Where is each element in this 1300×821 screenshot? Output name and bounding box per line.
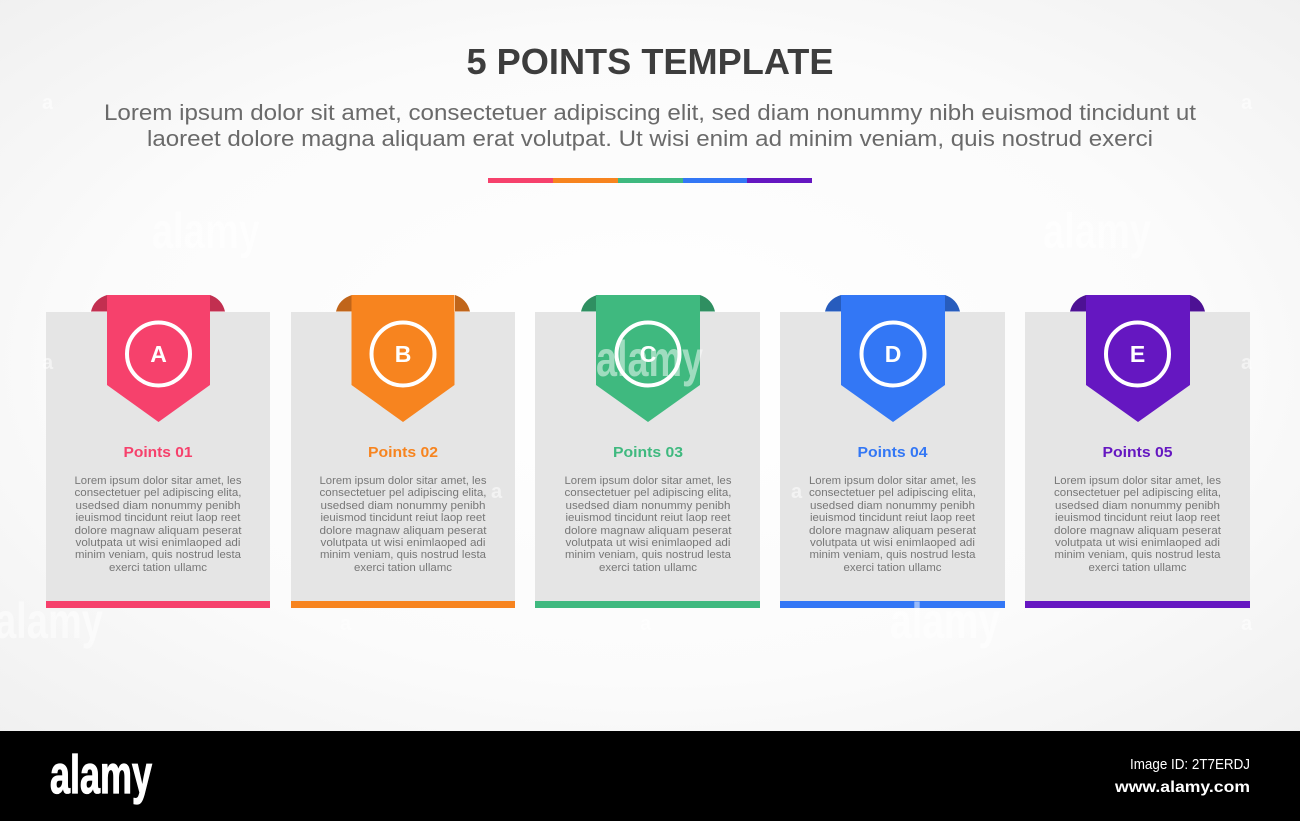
icon: ribbon C: [581, 295, 715, 422]
panel: point 03: [535, 295, 760, 608]
text block: point 05: Lorem ipsum dolor sitar amet, les: [1054, 475, 1222, 487]
footer url: www.alamy.com: [1114, 779, 1250, 796]
watermarks: a: [42, 92, 54, 114]
text block: point 05: ieuismod tincidunt reiut laop reet: [1055, 512, 1220, 524]
text block: point 02: minim veniam, quis nostrud lesta: [320, 549, 487, 561]
heading: points 05: Points 05: [1102, 444, 1172, 461]
text block: point 04: exerci tation ullamc: [844, 562, 942, 574]
text block: point 05: minim veniam, quis nostrud lesta: [1054, 549, 1221, 561]
watermarks: alamy: [152, 203, 260, 259]
text block: point 04: consectetuer pel adipiscing elita,: [809, 487, 976, 499]
panel: point 01: [46, 295, 270, 608]
text block: point 03: usedsed diam nonummy penibh: [566, 500, 730, 512]
text block: point 02: dolore magnaw aliquam peserat: [320, 525, 486, 537]
heading: points 03: Points 03: [613, 444, 683, 461]
text block: point 01: exerci tation ullamc: [109, 562, 208, 574]
text block: point 02: usedsed diam nonummy penibh: [320, 500, 486, 512]
text block: point 03: exerci tation ullamc: [599, 562, 698, 574]
icon: ribbon C: C: [640, 341, 656, 367]
text block: point 01: consectetuer pel adipiscing elita,: [74, 487, 242, 499]
watermarks: a: [340, 613, 352, 635]
text block: point 03: minim veniam, quis nostrud lesta: [565, 549, 732, 561]
text block: point 05: usedsed diam nonummy penibh: [1055, 500, 1220, 512]
text block: point 04: [809, 475, 977, 574]
watermarks: a: [1241, 92, 1253, 114]
text block: point 03: volutpata ut wisi enimlaoped adi: [566, 537, 730, 549]
watermarks: a: [640, 613, 652, 635]
panel: point 04: [780, 295, 1005, 608]
heading: points 01: Points 01: [124, 444, 192, 461]
text block: point 05: consectetuer pel adipiscing elita,: [1054, 487, 1221, 499]
text block: point 04: ieuismod tincidunt reiut laop reet: [810, 512, 975, 524]
text block: point 01: Lorem ipsum dolor sitar amet, les: [74, 475, 242, 487]
icon: ribbon B: B: [395, 341, 411, 367]
text block: point 02: consectetuer pel adipiscing elita,: [320, 487, 486, 499]
watermarks: alamy: [596, 331, 703, 387]
text block: point 01: [74, 475, 242, 574]
text block: point 03: dolore magnaw aliquam peserat: [564, 525, 732, 537]
text block: point 03: ieuismod tincidunt reiut laop reet: [566, 512, 730, 524]
subtitle text block: laoreet dolore magna aliquam erat volutpat. Ut wisi enim ad minim veniam, quis nostrud exerci: [147, 126, 1153, 151]
icon: ribbon D: [825, 295, 960, 422]
text block: point 01: usedsed diam nonummy penibh: [76, 500, 240, 512]
heading: points 04: Points 04: [858, 444, 928, 461]
panel: point 02: [291, 295, 515, 608]
text block: point 05: volutpata ut wisi enimlaoped adi: [1055, 537, 1220, 549]
text block: point 05: exerci tation ullamc: [1088, 562, 1187, 574]
text block: point 04: dolore magnaw aliquam peserat: [809, 525, 976, 537]
text block: point 03: consectetuer pel adipiscing elita,: [564, 487, 732, 499]
panel: point 05: [1025, 295, 1250, 608]
watermarks: [0, 92, 1253, 649]
watermarks: alamy: [890, 593, 1000, 649]
text block: point 04: Lorem ipsum dolor sitar amet, les: [809, 475, 977, 487]
footer logo: alamy: [50, 745, 152, 805]
watermarks: a: [1241, 613, 1253, 635]
footer bar: [0, 731, 1300, 821]
text block: point 02: volutpata ut wisi enimlaoped adi: [320, 537, 486, 549]
text block: point 02: ieuismod tincidunt reiut laop reet: [320, 512, 486, 524]
watermarks: a: [491, 481, 503, 503]
text block: point 04: minim veniam, quis nostrud lesta: [810, 549, 976, 561]
subtitle text block: [104, 100, 1196, 151]
footer image id: Image ID: 2T7ERDJ: [1130, 756, 1250, 773]
text block: point 03: Lorem ipsum dolor sitar amet, les: [564, 475, 732, 487]
icon: ribbon E: [1070, 295, 1205, 422]
subtitle text block: Lorem ipsum dolor sit amet, consectetuer adipiscing elit, sed diam nonummy nibh euismod tincidunt ut: [104, 100, 1196, 125]
icon: ribbon A: [91, 295, 225, 422]
watermarks: a: [1241, 352, 1253, 374]
watermarks: a: [42, 352, 54, 374]
text block: point 02: Lorem ipsum dolor sitar amet, les: [320, 475, 487, 487]
text block: point 03: [564, 475, 732, 574]
watermarks: a: [791, 481, 803, 503]
text block: point 05: [1054, 475, 1222, 574]
text block: point 02: [320, 475, 487, 574]
icon: ribbon D: D: [885, 341, 901, 367]
text block: point 05: dolore magnaw aliquam peserat: [1054, 525, 1221, 537]
text block: point 04: usedsed diam nonummy penibh: [810, 500, 975, 512]
icon: ribbon E: E: [1130, 341, 1145, 367]
text block: point 01: volutpata ut wisi enimlaoped adi: [76, 537, 240, 549]
multicolour divider: [488, 178, 812, 183]
text block: point 04: volutpata ut wisi enimlaoped adi: [810, 537, 975, 549]
text block: point 01: minim veniam, quis nostrud lesta: [75, 549, 242, 561]
text block: point 02: exerci tation ullamc: [354, 562, 453, 574]
title: 5 POINTS TEMPLATE: [466, 41, 834, 82]
text block: point 01: ieuismod tincidunt reiut laop reet: [76, 512, 240, 524]
icon: ribbon A: A: [150, 341, 167, 367]
heading: points 02: Points 02: [368, 444, 438, 461]
watermarks: alamy: [1043, 203, 1151, 259]
text block: point 01: dolore magnaw aliquam peserat: [74, 525, 242, 537]
icon: ribbon B: [336, 295, 470, 422]
